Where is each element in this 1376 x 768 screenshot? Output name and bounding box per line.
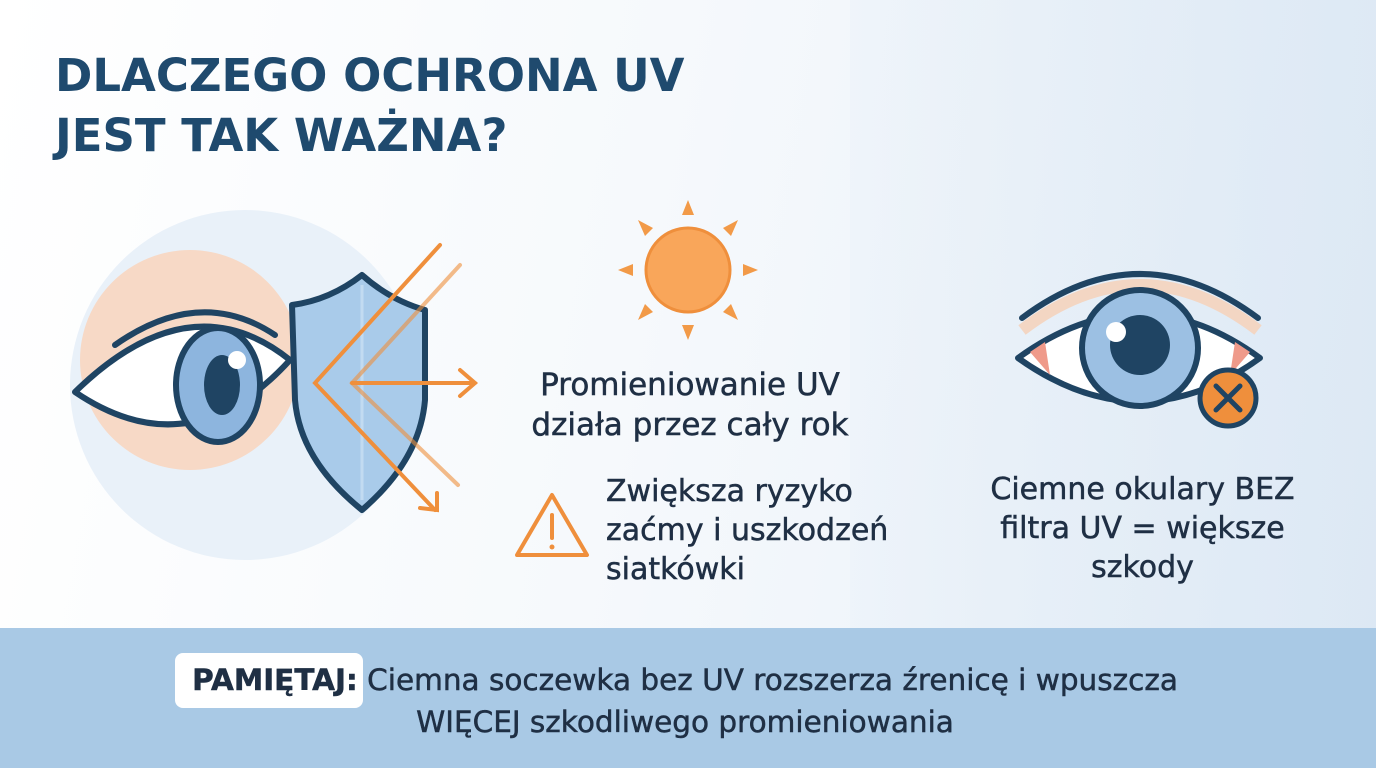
icon: sun: [618, 200, 758, 340]
icon: eye with X: [1018, 274, 1260, 426]
title: DLACZEGO OCHRONA UV: [55, 49, 684, 102]
text: UV all year: [531, 367, 849, 443]
bottom text: WIĘCEJ szkodliwego promieniowania: [416, 705, 954, 739]
text: risk: [606, 474, 888, 587]
text: risk: siatkówki: [606, 552, 745, 587]
bottom text: PAMIĘTAJ: Ciemna soczewka bez UV rozszerza źrenicę i wpuszcza: [192, 663, 1178, 697]
title: [52, 49, 684, 162]
right panel background: [850, 0, 1376, 628]
text: dark glasses: filtra UV = większe: [1000, 511, 1285, 546]
bottom band: [0, 628, 1376, 768]
text: dark glasses: Ciemne okulary BEZ: [990, 472, 1295, 507]
icon: warning: [517, 495, 587, 555]
bottom text: [192, 663, 1178, 739]
text: dark glasses: szkody: [1091, 550, 1194, 585]
arrows: UV reflection: [315, 245, 475, 510]
title: JEST TAK WAŻNA?: [55, 109, 507, 162]
text: risk: Zwiększa ryzyko: [606, 474, 853, 509]
text: risk: zaćmy i uszkodzeń: [606, 513, 888, 548]
text: dark glasses: [990, 472, 1295, 585]
text: UV all year: działa przez cały rok: [531, 407, 849, 443]
icon: shield: [292, 275, 425, 510]
pill: PAMIĘTAJ: [175, 653, 363, 708]
text: UV all year: Promieniowanie UV: [540, 367, 840, 403]
